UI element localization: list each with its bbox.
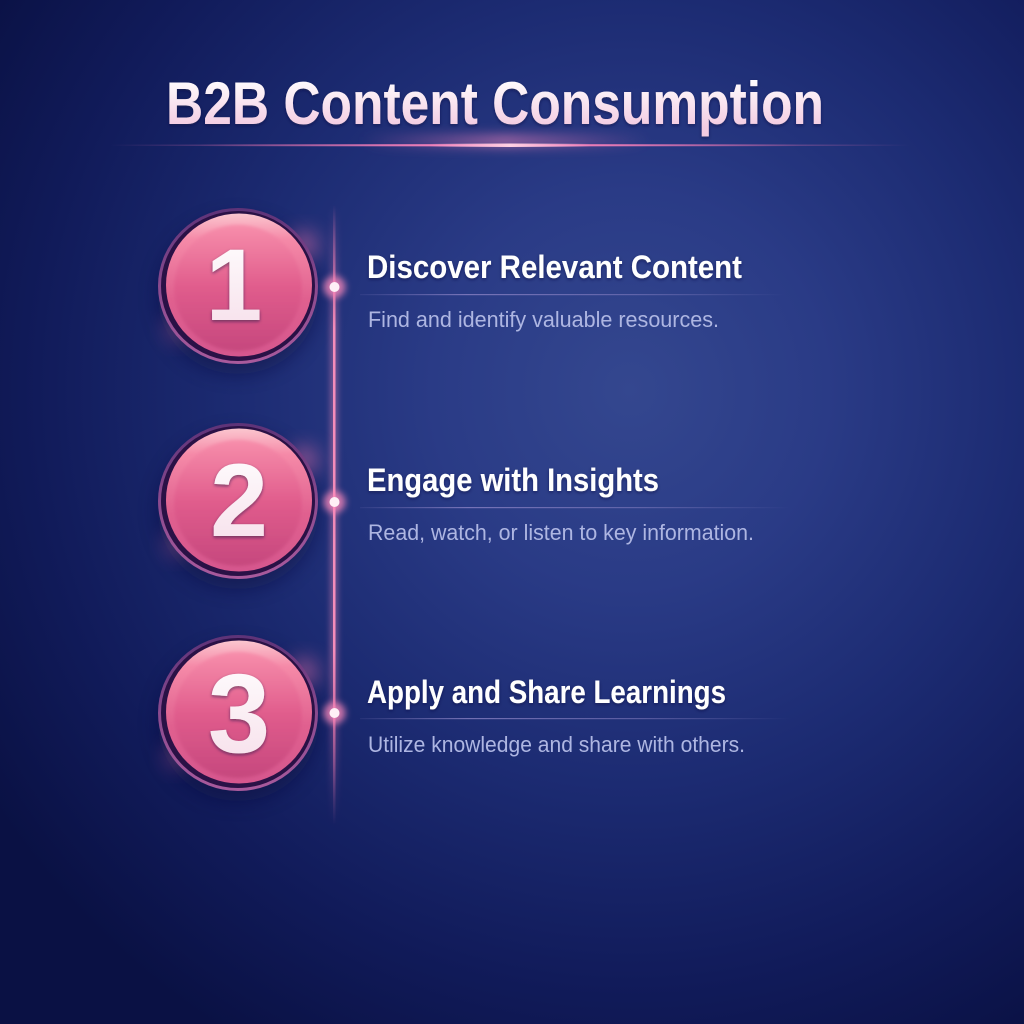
- node dot 3: [324, 702, 346, 724]
- number badge 2: [158, 424, 318, 589]
- divider 3: [360, 718, 790, 719]
- number badge 1: 1: [206, 228, 262, 342]
- description 1: Find and identify valuable resources.: [368, 307, 719, 332]
- description 3: Utilize knowledge and share with others.: [368, 732, 745, 757]
- step 2: [158, 424, 790, 589]
- title: B2B Content Consumption: [166, 70, 824, 137]
- description 2: Read, watch, or listen to key information.: [368, 520, 754, 545]
- step 1: [158, 210, 785, 374]
- number badge 3: [158, 636, 318, 801]
- number badge 1: [158, 210, 318, 374]
- node dot 2: [324, 491, 346, 513]
- node dot 1: [324, 276, 346, 298]
- title underline: [110, 136, 910, 147]
- number badge 3: 3: [208, 651, 270, 776]
- heading 1: Discover Relevant Content: [367, 249, 742, 285]
- heading 2: Engage with Insights: [367, 462, 659, 498]
- divider 1: [360, 294, 785, 295]
- step 3: [158, 636, 790, 801]
- heading 3: Apply and Share Learnings: [367, 674, 726, 710]
- timeline line: [330, 205, 338, 825]
- number badge 2: 2: [210, 443, 268, 559]
- divider 2: [360, 507, 790, 508]
